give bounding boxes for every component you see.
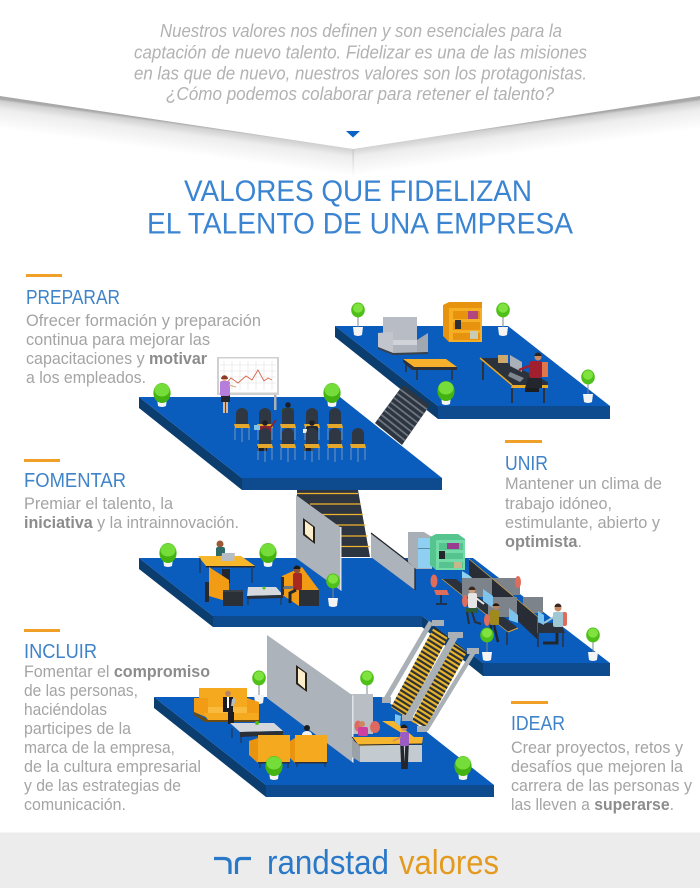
bench table	[403, 359, 457, 380]
person seen from behind	[302, 725, 312, 735]
woman at cubicle	[462, 587, 484, 624]
chair	[304, 428, 320, 462]
lounge scene	[159, 540, 340, 607]
left desk	[442, 579, 518, 645]
escalators	[382, 620, 479, 732]
panel: idear: Crear proyectos, retos y	[511, 739, 684, 757]
chair	[304, 408, 320, 442]
training room scene	[153, 357, 366, 462]
panel: incluir: participes de la	[24, 720, 132, 738]
panel: incluir: marca de la empresa,	[24, 739, 175, 757]
panel: unir: trabajo idóneo,	[505, 495, 612, 513]
plant	[454, 756, 472, 780]
desk	[198, 553, 255, 583]
coffee table	[247, 586, 283, 605]
panel: unir: Mantener un clima de	[505, 475, 662, 493]
panel: fomentar	[24, 459, 239, 532]
back cubicle panels	[462, 571, 543, 613]
long dark partition	[469, 559, 538, 640]
office desk with worker	[480, 352, 548, 403]
panel: fomentar: FOMENTAR	[24, 470, 126, 492]
chair	[327, 408, 343, 442]
plant	[581, 370, 595, 403]
panel: fomentar: Premiar el talento, la	[24, 495, 174, 513]
bookshelf	[443, 302, 482, 342]
panel: unir	[505, 440, 662, 551]
seated person with tablet	[303, 420, 318, 451]
plant	[326, 574, 340, 607]
right desk with man	[538, 604, 567, 647]
front cubicle panels	[462, 578, 518, 623]
seated person, back row	[282, 402, 294, 420]
panel: incluir: de las personas,	[24, 682, 138, 700]
receptionist	[354, 720, 380, 736]
intro text: captación de nuevo talento. Fidelizar es una de las misiones	[134, 42, 587, 62]
plant	[159, 543, 177, 567]
plant	[323, 383, 341, 407]
seated person with red top	[254, 420, 276, 451]
panel: incluir: haciéndolas	[24, 701, 107, 719]
plant	[259, 543, 277, 567]
intro text	[134, 21, 587, 104]
presenter	[220, 375, 236, 413]
back office chair	[430, 574, 449, 604]
plant	[480, 628, 494, 661]
panel: incluir: de la cultura empresarial	[24, 758, 201, 776]
chair	[280, 408, 296, 442]
stairs between top floors	[375, 385, 430, 445]
panel: preparar: Ofrecer formación y preparación	[26, 312, 261, 330]
title: VALORES QUE FIDELIZAN	[184, 175, 532, 208]
intro text: ¿Cómo podemos colaborar para retener el talento?	[166, 84, 554, 104]
plant	[496, 302, 510, 336]
chair	[350, 428, 366, 462]
panel: unir: optimista.	[505, 533, 582, 551]
intro text: Nuestros valores nos definen y son esenciales para la	[160, 21, 562, 41]
orange sofa and ottoman	[205, 567, 243, 606]
fridge	[408, 532, 432, 569]
large wall with framed picture	[267, 635, 354, 763]
panel: idear: IDEAR	[511, 713, 565, 735]
woman in olive top	[484, 602, 500, 642]
panel: idear: las lleven a superarse.	[511, 796, 674, 814]
chair	[280, 428, 296, 462]
chair	[327, 428, 343, 462]
panel: incluir	[24, 629, 210, 814]
panel: preparar: capacitaciones y motivar	[26, 350, 208, 368]
footer	[0, 832, 700, 888]
office scene	[408, 532, 600, 661]
panel: preparar: a los empleados.	[26, 369, 146, 387]
plant	[153, 383, 171, 407]
plant	[586, 628, 600, 661]
panel: incluir: comunicación.	[24, 796, 126, 814]
platform: ground floor	[154, 697, 494, 797]
plant	[360, 670, 374, 704]
panel: preparar: continua para mejorar las	[26, 331, 210, 349]
ground floor scene	[194, 635, 472, 780]
panel: incluir: INCLUIR	[24, 641, 97, 663]
panel: incluir: y de las estrategias de	[24, 777, 181, 795]
reception desk	[352, 714, 424, 762]
panel: preparar	[26, 274, 261, 387]
plant	[351, 302, 365, 336]
platform: middle floor	[139, 558, 610, 676]
panel: fomentar: iniciativa y la intrainnovación.	[24, 514, 239, 532]
logo text	[267, 844, 499, 882]
title: EL TALENTO DE UNA EMPRESA	[147, 208, 573, 240]
intro text: en las que de nuevo, nuestros valores son los protagonistas.	[134, 64, 587, 84]
panel: idear: desafíos que mejoren la	[511, 758, 684, 776]
stairs to middle floor	[297, 490, 370, 557]
icon: down arrow	[346, 131, 360, 138]
panel: unir: estimulante, abierto y	[505, 514, 661, 532]
green shelf	[430, 534, 465, 570]
panel: incluir: Fomentar el compromiso	[24, 663, 210, 681]
panel: idear	[511, 701, 693, 814]
top floor furniture	[351, 302, 595, 405]
chair	[234, 408, 250, 442]
orange sofa with seated man	[194, 688, 259, 724]
person at desk with laptop	[216, 540, 230, 583]
armchair	[378, 317, 428, 355]
armchair with person	[281, 566, 319, 606]
front armchairs	[249, 735, 327, 768]
top chevron shadow band	[0, 96, 700, 190]
coffee table	[230, 721, 283, 743]
partition wall	[371, 533, 415, 590]
icon: randstad logo	[214, 858, 251, 874]
back column	[345, 694, 373, 734]
platform: top office floor	[335, 326, 610, 419]
chair	[257, 428, 273, 462]
logo text: randstad	[267, 844, 389, 882]
platform: training floor	[139, 397, 442, 490]
whiteboard with chart	[217, 357, 279, 410]
standing person	[393, 725, 409, 769]
wall with framed picture	[296, 495, 342, 591]
plant	[265, 756, 283, 780]
logo text: valores	[399, 844, 499, 882]
title	[147, 175, 573, 240]
plant	[437, 381, 455, 405]
chair	[257, 408, 273, 442]
plant	[252, 670, 266, 704]
panel: idear: carrera de las personas y	[511, 777, 693, 795]
panel: unir: UNIR	[505, 453, 548, 475]
panel: preparar: PREPARAR	[26, 287, 120, 309]
